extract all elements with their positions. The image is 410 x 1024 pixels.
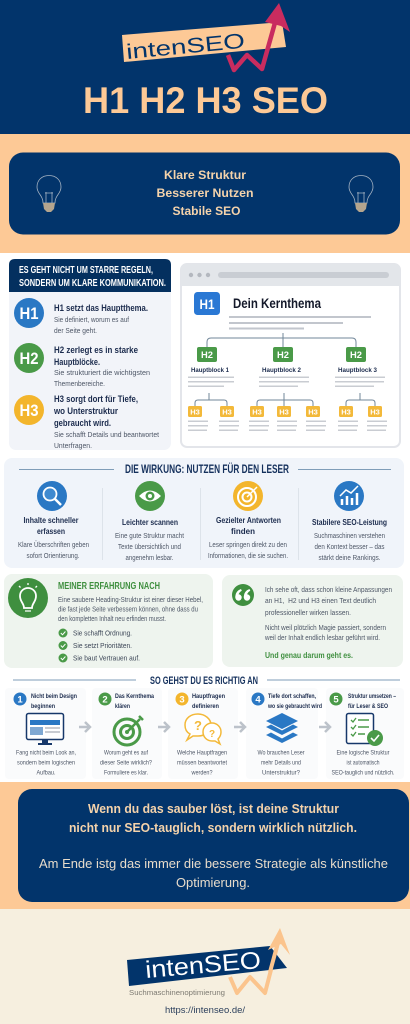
panel: personal experience [4,574,213,668]
H1 item: Sie definiert, worum es auf [54,317,129,324]
H1 item: H1 setzt das Hauptthema. [54,303,148,313]
quote text: Nicht weil plötzlich Magie passiert, sondern [265,625,386,632]
body text: die fast jede Seite verbessern können, ohne dass du [58,606,198,614]
step 4: wo sie gebraucht wird [267,704,322,710]
step 3: Welche Hauptfragen [177,750,227,756]
H2 item: H2 [20,349,38,368]
icon: quote mark [232,584,254,606]
H2 item: Hauptblöcke. [54,357,100,367]
step 1: Nicht beim Design [31,694,77,700]
benefit 2: Eine gute Struktur macht [115,533,184,540]
step 5: Struktur umsetzen – [348,694,397,700]
icon: magnifier [37,481,67,511]
H3 item [14,394,159,450]
checklist: Sie schafft Ordnung. [73,628,132,638]
benefit 2: Texte übersichtlich und [118,544,181,551]
heading: MEINER ERFAHRUNG NACH [58,581,160,592]
conclusion bold text [69,801,357,835]
section heading: DIE WIRKUNG: NUTZEN FÜR DEN LESER [125,461,289,476]
H2 block 2 [262,347,301,374]
footer [0,909,410,1024]
panel heading: SONDERN UM KLARE KOMMUNIKATION. [19,278,166,289]
H2 item: Sie strukturiert die wichtigsten [54,370,150,377]
step 2: Das Kernthema [115,694,155,700]
conclusion regular text [39,857,388,890]
benefit 1: Klare Überschriften geben [18,541,89,549]
icon: question bubbles: ? [209,729,215,740]
footer logo: Suchmaschinenoptimierung [129,988,225,997]
checklist [58,628,140,662]
panel: benefits for the reader [4,458,404,568]
quote text: weil der Inhalt endlich lesbar geführt wird. [264,635,380,642]
benefit 1: erfassen [37,527,65,536]
icon: green light bulb [8,578,48,618]
H3 badges: H3 [370,408,380,416]
checklist: Sie baut Vertrauen auf. [73,654,140,662]
H2 block 2: Hauptblock 2 [262,367,301,374]
step 1: Fang nicht beim Look an, [16,750,76,756]
step 2: klären [115,704,130,710]
step 4: Wo brauchen Leser [258,750,305,756]
step 3: Hauptfragen [192,694,225,700]
icon: growth chart [334,481,364,511]
title: H1 H2 H3 SEO [83,79,328,121]
logo: intenSEO: intenSEO [125,30,246,64]
icon: question bubbles: ? [194,718,202,733]
H3 badges: H3 [190,408,200,416]
H3 item: H3 sorgt dort für Tiefe, [54,394,138,404]
H2 block 1: H2 [201,350,213,361]
key messages: Stabile SEO [172,206,241,218]
key messages [156,170,254,218]
benefit 4: den Kontext besser – das [314,544,385,551]
H2 item: H2 zerlegt es in starke [54,345,138,355]
H2 item [14,343,150,388]
benefit 1: Inhalte schneller [24,516,78,525]
H3 badges [188,406,382,417]
quote text: professioneller wirken lassen. [265,610,351,617]
step 2: Formuliere es klar. [104,770,148,776]
H3 badges: H3 [279,408,289,416]
panel: heading levels explained [9,259,171,450]
step 5: 5 [333,694,339,706]
quote conclusion: Und genau darum geht es. [265,650,353,660]
panel: quote [222,575,403,667]
section: steps [5,675,404,779]
step 3: definieren [192,704,219,710]
H2 block 3: Hauptblock 3 [338,367,377,374]
conclusion regular text: Am Ende istg das immer die bessere Strategie als künstliche [39,857,388,871]
step 1: Aufbau. [36,770,56,776]
header band [0,0,410,134]
peach band with key messages [0,134,410,253]
H1 item: H1 [20,304,38,323]
website URL: https://intenseo.de/ [165,1005,245,1016]
main topic heading: Dein Kernthema [233,295,321,311]
H1 badge [194,292,220,315]
quote text: an H1, H2 und H3 einen Text deutlich [265,598,376,605]
step 2: dieser Seite wirklich? [100,760,152,766]
step 4: mehr Details und [261,760,301,766]
checklist: Sie setzt Prioritäten. [73,641,132,650]
footer logo: intenSEO [144,947,262,984]
H2 block 3 [338,347,377,374]
step 5: ist automatisch [346,760,380,766]
logo: intenSEO [122,3,290,70]
H2 block 1: Hauptblock 1 [191,367,229,374]
icon: checklist [346,714,383,746]
benefit 4: Suchmaschinen verstehen [314,533,385,540]
icon: eye [135,481,165,511]
body text: Eine saubere Heading-Struktur ist einer dieser Hebel, [58,597,203,604]
conclusion bold text: nicht nur SEO-tauglich, sondern wirklich nützlich. [69,820,357,835]
H2 block 2: H2 [277,350,289,361]
step 1: beginnen [31,704,55,710]
benefit 4: Stabilere SEO-Leistung [312,518,387,527]
benefit 3: Gezielter Antworten [216,516,281,525]
H2 block 3: H2 [350,350,362,361]
panel heading [19,265,166,289]
benefit 4 [312,481,387,562]
benefit 1: sofort Orientierung. [26,553,80,560]
conclusion regular text: Optimierung. [176,876,250,890]
benefit 4: stärkt deine Rankings. [318,555,381,562]
benefit 2: Leichter scannen [122,518,178,527]
conclusion band [0,782,410,909]
H3 badges: H3 [222,408,232,416]
icon: light bulb left [37,176,61,212]
benefit 3: Informationen, die sie suchen. [208,553,288,560]
H1 item [14,298,148,335]
step 3: werden? [191,770,213,776]
icon: target [233,481,263,511]
icon: layers [266,713,298,743]
panel heading: ES GEHT NICHT UM STARRE REGELN, [19,265,153,276]
footer logo [127,928,290,997]
step 1 [14,692,77,776]
step 5 [330,692,397,776]
step 1: 1 [17,694,23,706]
quote text [264,587,392,642]
step 4: 4 [255,694,261,706]
icon: light bulb right [349,176,373,212]
H3 item: Sie schafft Details und beantwortet [54,432,159,439]
arrows between steps [79,722,330,732]
H3 badges: H3 [252,408,262,416]
step 2: Worum geht es auf [104,750,148,756]
step 4 [252,692,322,776]
step 3: 3 [179,694,185,706]
benefit 3: finden [231,527,255,536]
step 4: Tiefe dort schaffen, [268,694,316,700]
H1 badge: H1 [200,296,215,312]
icon: monitor [26,714,64,745]
step 1: sondern beim logischen [17,760,75,766]
icon: question bubbles [185,714,221,744]
step 3 [176,692,227,776]
H3 badges: H3 [308,408,318,416]
H3 item: Unterfragen. [54,443,92,450]
benefit 2: angenehm lesbar. [126,555,174,562]
step 5: Eine logische Struktur [336,750,390,756]
key messages: Besserer Nutzen [156,188,254,200]
H2 block 1 [191,347,229,374]
benefit 2 [115,481,184,562]
benefit 3 [208,481,288,560]
H3 item: H3 [20,401,38,420]
H2 item: Themenbereiche. [54,381,105,388]
step 4: Unterstruktur? [262,770,300,776]
H1 item: der Seite geht. [54,328,97,335]
step 3: müssen beantwortet [177,760,227,766]
key messages: Klare Struktur [164,170,247,182]
benefit 1 [18,481,89,560]
body text [58,597,203,623]
step 2: 2 [102,694,108,706]
step 5: SEO-tauglich und nützlich. [332,770,395,776]
icon: target with arrow [114,716,143,745]
body text: den kompletten Inhalt neu erfinden musst. [58,616,166,623]
H3 item: gebraucht wird. [54,418,111,428]
benefit 3: Leser springen direkt zu den [209,542,287,549]
H3 badges: H3 [341,408,351,416]
panel: browser with heading hierarchy [181,264,400,447]
conclusion bold text: Wenn du das sauber löst, ist deine Struktur [88,801,339,816]
step 5: für Leser & SEO [348,704,388,710]
step 2 [98,692,155,776]
section heading: SO GEHST DU ES RICHTIG AN [150,675,258,687]
H3 item: wo Unterstruktur [53,406,118,416]
quote text: Ich sehe oft, dass schon kleine Anpassungen [265,587,392,594]
